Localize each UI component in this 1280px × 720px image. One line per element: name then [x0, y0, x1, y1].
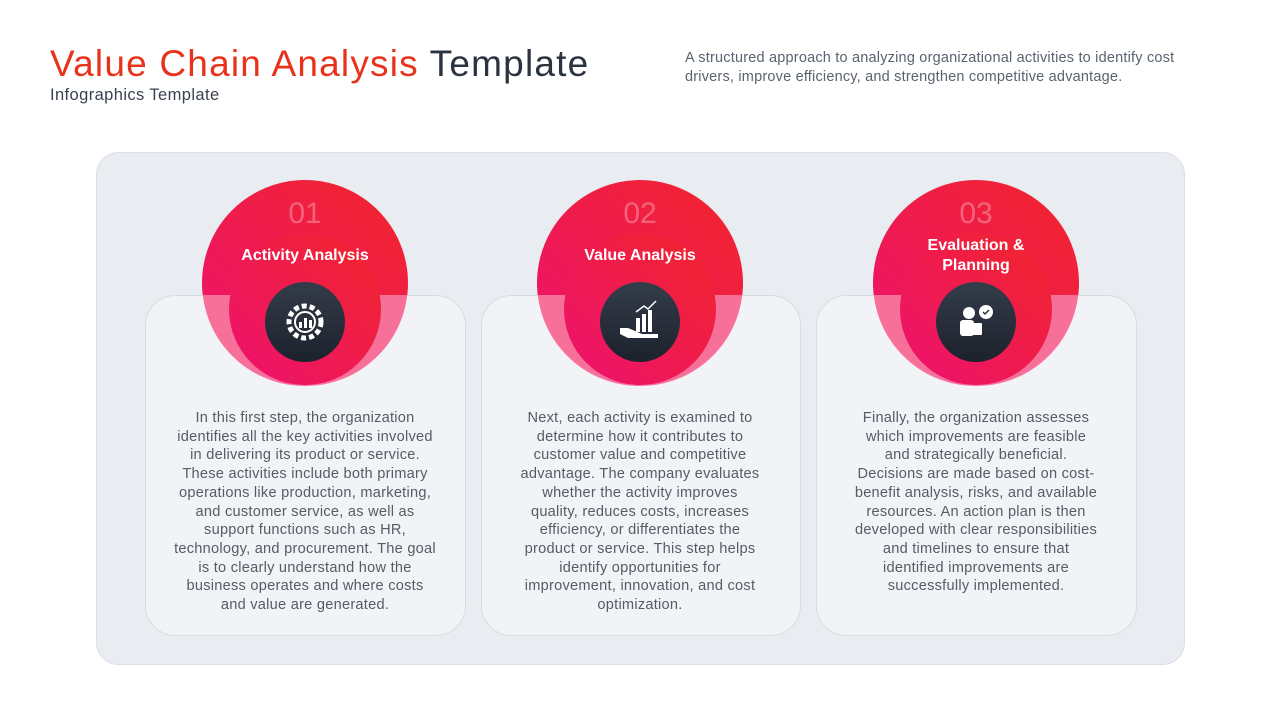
- number 03: 03: [959, 197, 993, 230]
- heading 2: Value Analysis: [584, 247, 696, 264]
- body text 1: In this first step, the organization identifies all the key activities involved in delivering its product or service. These activities include both primary operations like production, marketing, and customer service, as well as support functions such as HR, technology, and procurement. The goal is to clearly understand how the business operates and where costs and value are generated.: [174, 410, 436, 613]
- heading 3: [928, 237, 1024, 274]
- body text 3: Finally, the organization assesses which improvements are feasible and strategically beneficial. Decisions are made based on cost-benefit analysis, risks, and available resources. An action plan is then developed with clear responsibilities and timelines to ensure that identified improvements are successfully implemented.: [855, 410, 1097, 594]
- title: Value Chain Analysis Template: [50, 43, 589, 84]
- heading 3: Evaluation &: [928, 237, 1024, 254]
- heading 3: Planning: [942, 257, 1010, 274]
- step 3: [816, 180, 1136, 636]
- description: A structured approach to analyzing organizational activities to identify cost drivers, improve efficiency, and strengthen competitive advantage.: [685, 50, 1174, 85]
- subtitle: Infographics Template: [50, 86, 220, 104]
- step 2: [482, 180, 800, 636]
- number 01: 01: [288, 197, 322, 230]
- heading 1: Activity Analysis: [241, 247, 369, 264]
- body text 2: Next, each activity is examined to determine how it contributes to customer value and competitive advantage. The company evaluates whether the activity improves quality, reduces costs, increases efficiency, or differentiates the product or service. This step helps identify opportunities for improvement, innovation, and cost optimization.: [521, 410, 759, 613]
- number 02: 02: [623, 197, 657, 230]
- step 1: [146, 180, 466, 636]
